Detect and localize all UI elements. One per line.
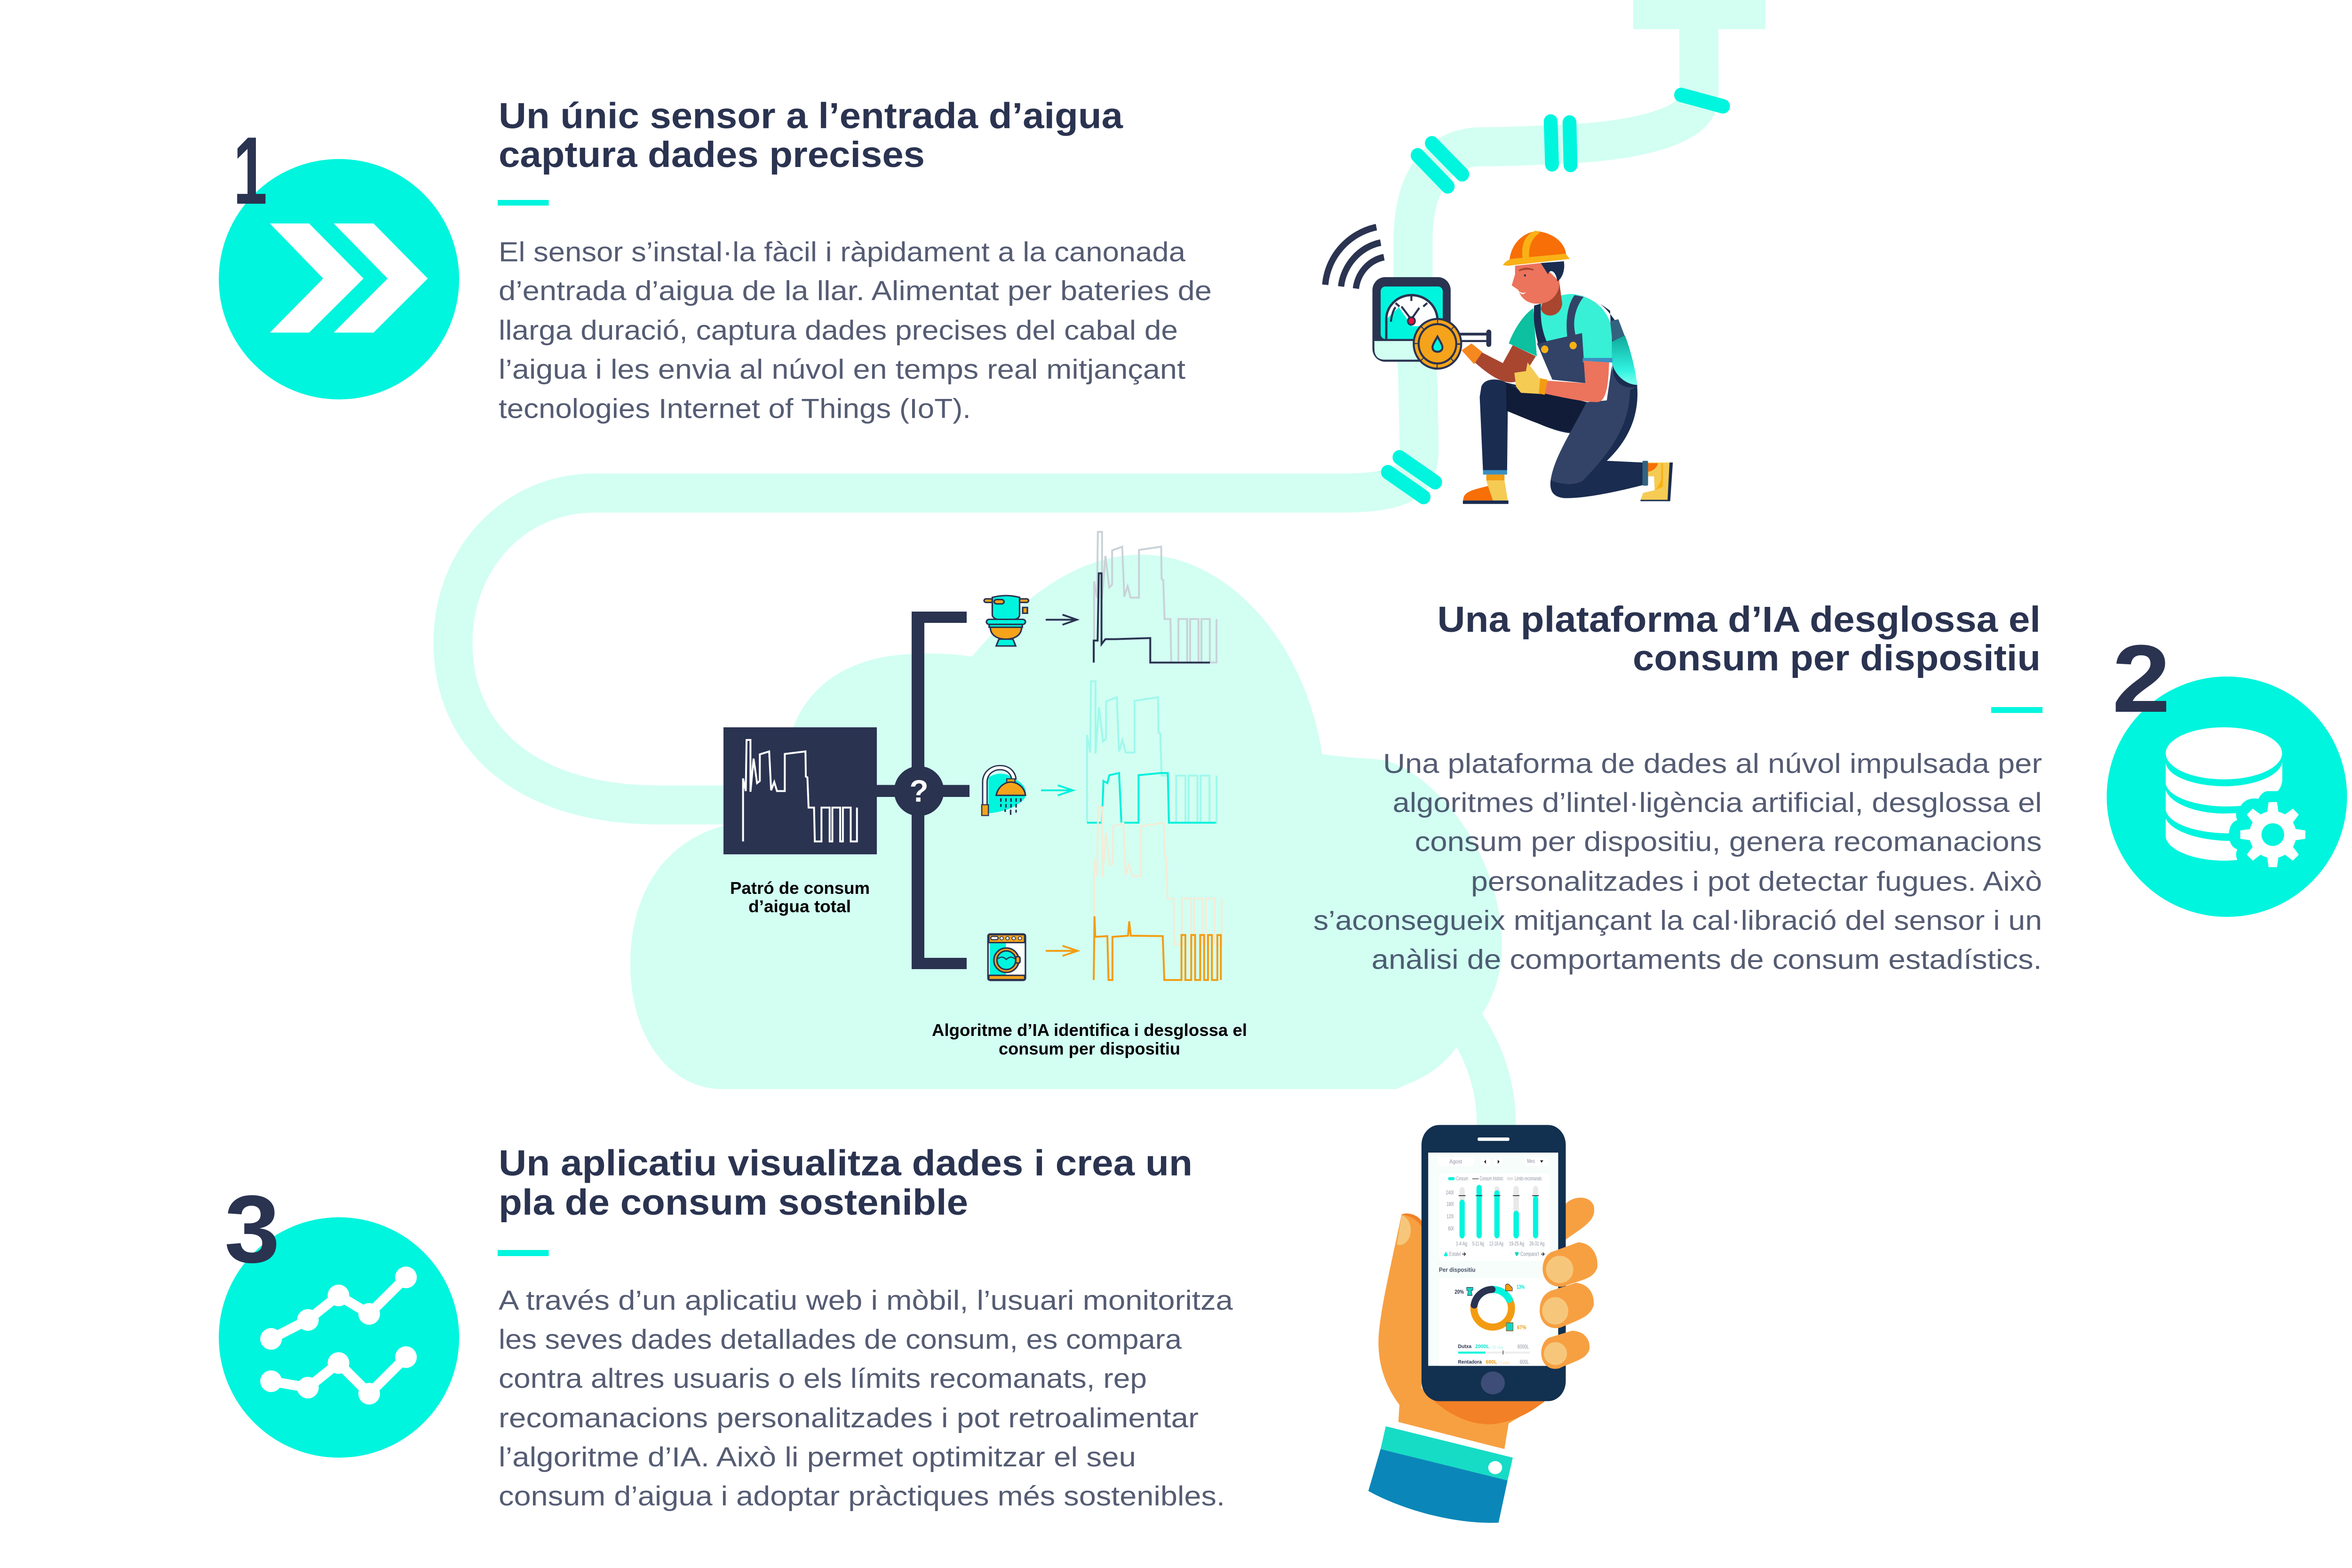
step 3 heading: Un aplicatiu visualitza dades i crea un: [499, 1143, 1192, 1184]
step 3 circle icon: line chart: [219, 1218, 459, 1457]
icon: washing machine: [988, 934, 1025, 980]
consumption bar chart: Límits recomanats: [1515, 1176, 1542, 1182]
illustration: hand holding phone app: [1368, 1125, 1597, 1523]
device donut card: / 4 usos: [1499, 1360, 1510, 1365]
step 2 body text: Una plataforma de dades al núvol impulsada per: [1383, 748, 2042, 779]
pipe clamps: [1388, 95, 1723, 497]
step number 3: 3: [224, 1176, 280, 1283]
step 2 body text: anàlisi de comportaments de consum estadístics.: [1372, 945, 2042, 975]
step 2 heading: Una plataforma d’IA desglossa el: [1438, 599, 2041, 640]
icon: toilet: [984, 596, 1029, 646]
device donut card: / 20 usos: [1491, 1345, 1503, 1350]
step 2 block: [1313, 599, 2347, 975]
total consumption graph: [743, 740, 857, 842]
step 1 body text: d’entrada d’aigua de la llar. Alimentat per bateries de: [499, 276, 1212, 306]
consumption bar chart: 180l: [1446, 1202, 1454, 1208]
ghost graph: toilet: [1094, 532, 1216, 662]
step 1 circle icon: chevrons: [219, 159, 459, 399]
step 3 body text: [499, 1285, 1233, 1512]
shower graph: [1087, 773, 1216, 823]
consumption bar chart: Consum històric: [1480, 1176, 1503, 1182]
device donut card: 2000L: [1475, 1344, 1489, 1350]
month selector: Mes: [1527, 1159, 1535, 1164]
label: algorithm: [932, 1020, 1247, 1059]
step number 2: 2: [2112, 625, 2170, 732]
ghost graph: shower: [1087, 681, 1216, 823]
consumption bar chart: 26-31 Ag: [1529, 1241, 1544, 1247]
step 2 circle icon: database and gear: [2106, 677, 2347, 917]
label: algorithm: consum per dispositiu: [999, 1039, 1180, 1059]
consumption bar chart: 1-4 Ag: [1456, 1241, 1467, 1247]
ghost graph: washer: [1094, 807, 1222, 944]
consumption bar chart: 60l: [1448, 1226, 1454, 1232]
device donut card: Rentadora: [1458, 1359, 1482, 1365]
step 1 block: [219, 96, 1212, 424]
section title: Per dispositiu: [1439, 1267, 1476, 1274]
consumption bar chart: 240l: [1446, 1190, 1454, 1196]
arrow: toilet: [1046, 615, 1077, 625]
step 3 body text: A través d’un aplicatiu web i mòbil, l’usuari monitoritza: [499, 1285, 1233, 1316]
step 1 body text: l’aigua i les envia al núvol en temps real mitjançant: [499, 354, 1185, 385]
device donut card: Dutxa: [1458, 1344, 1472, 1350]
step 1 heading: [499, 96, 1123, 175]
shirt cuff: [1368, 1421, 1513, 1523]
phone body: [1422, 1125, 1566, 1401]
arrow: shower: [1041, 785, 1073, 796]
step 2 body text: algoritmes d’lintel·ligència artificial, desglossa el: [1393, 788, 2042, 818]
consumption bar chart: Estalvi: [1449, 1251, 1461, 1258]
icon: shower: [982, 768, 1026, 816]
step 3 body text: les seves dades detallades de consum, es compara: [499, 1324, 1182, 1355]
step 3 block: [219, 1143, 1233, 1512]
consumption bar chart: 5-11 Ag: [1472, 1241, 1484, 1247]
total consumption box: [723, 727, 877, 854]
disaggregation diagram: [723, 532, 1247, 1059]
step 2 body text: [1313, 748, 2042, 975]
step 2 body text: consum per dispositiu, genera recomanacions: [1415, 827, 2042, 857]
hand: [1378, 1198, 1594, 1449]
consumption bar chart: 120l: [1446, 1214, 1454, 1220]
label: algorithm: Algoritme d’IA identifica i desglossa el: [932, 1020, 1247, 1040]
device donut card: 67%: [1517, 1325, 1526, 1331]
label: total pattern: [730, 878, 870, 916]
step 1 rule: [498, 200, 548, 206]
bracket connector: [877, 612, 969, 969]
wifi signal: [1325, 227, 1384, 288]
step 1 body text: [499, 237, 1212, 424]
label: total pattern: Patró de consum: [730, 878, 870, 898]
water pipe: [453, 0, 1765, 1125]
question mark: ?: [909, 773, 929, 808]
step 1 heading: captura dades precises: [499, 135, 925, 175]
device donut card: 13%: [1517, 1285, 1525, 1290]
label: total pattern: d’aigua total: [748, 897, 851, 916]
step 2 body text: personalitzades i pot detectar fugues. Això: [1471, 867, 2042, 897]
step 1 body text: El sensor s’instal·la fàcil i ràpidament a la canonada: [499, 237, 1186, 268]
consumption bar chart: Compara’t: [1520, 1251, 1539, 1258]
month selector: Agost: [1449, 1159, 1462, 1165]
fingers: [1540, 1242, 1597, 1369]
step 3 body text: recomanacions personalitzades i pot retroalimentar: [499, 1403, 1199, 1433]
consumption bar chart: 12-18 Ag: [1489, 1241, 1503, 1247]
step 3 rule: [498, 1250, 548, 1256]
step 1 body text: llarga duració, captura dades precises del cabal de: [499, 315, 1178, 346]
illustration: worker installing sensor: [1325, 95, 1723, 504]
step number 1: 1: [233, 117, 267, 224]
step 3 body text: contra altres usuaris o els límits recomanats, rep: [499, 1363, 1147, 1394]
washer graph: [1094, 916, 1221, 980]
device donut card: [1439, 1278, 1550, 1366]
toilet graph: [1094, 573, 1210, 662]
step 2 body text: s’aconsegueix mitjançant la cal·libració del sensor i un: [1313, 906, 2042, 936]
step 2 rule: [1991, 707, 2042, 713]
step 3 heading: [499, 1143, 1192, 1223]
step 3 heading: pla de consum sostenible: [499, 1182, 968, 1223]
cloud background: [630, 555, 1502, 1089]
arrow: washer: [1046, 946, 1078, 956]
consumption bar chart: [1439, 1173, 1550, 1261]
worker figure: [1462, 231, 1673, 504]
device donut card: 6000L: [1518, 1344, 1529, 1350]
consumption bar chart: 19-25 Ag: [1509, 1241, 1524, 1247]
step 2 heading: [1438, 599, 2041, 678]
step 1 heading: Un únic sensor a l’entrada d’aigua: [499, 96, 1123, 136]
water meter sensor: [1373, 277, 1491, 369]
month selector: [1438, 1157, 1548, 1166]
step 3 body text: consum d’aigua i adoptar pràctiques més sostenibles.: [499, 1481, 1225, 1512]
device donut card: 600L: [1520, 1360, 1529, 1365]
device donut card: 20%: [1454, 1289, 1464, 1295]
step 3 body text: l’algoritme d’IA. Això li permet optimitzar el seu: [499, 1442, 1136, 1472]
consumption bar chart: Consum: [1456, 1176, 1468, 1182]
step 2 heading: consum per dispositiu: [1633, 638, 2041, 678]
device donut card: 680L: [1486, 1359, 1497, 1365]
app screen: [1438, 1157, 1550, 1366]
step 1 body text: tecnologies Internet of Things (IoT).: [499, 393, 971, 424]
